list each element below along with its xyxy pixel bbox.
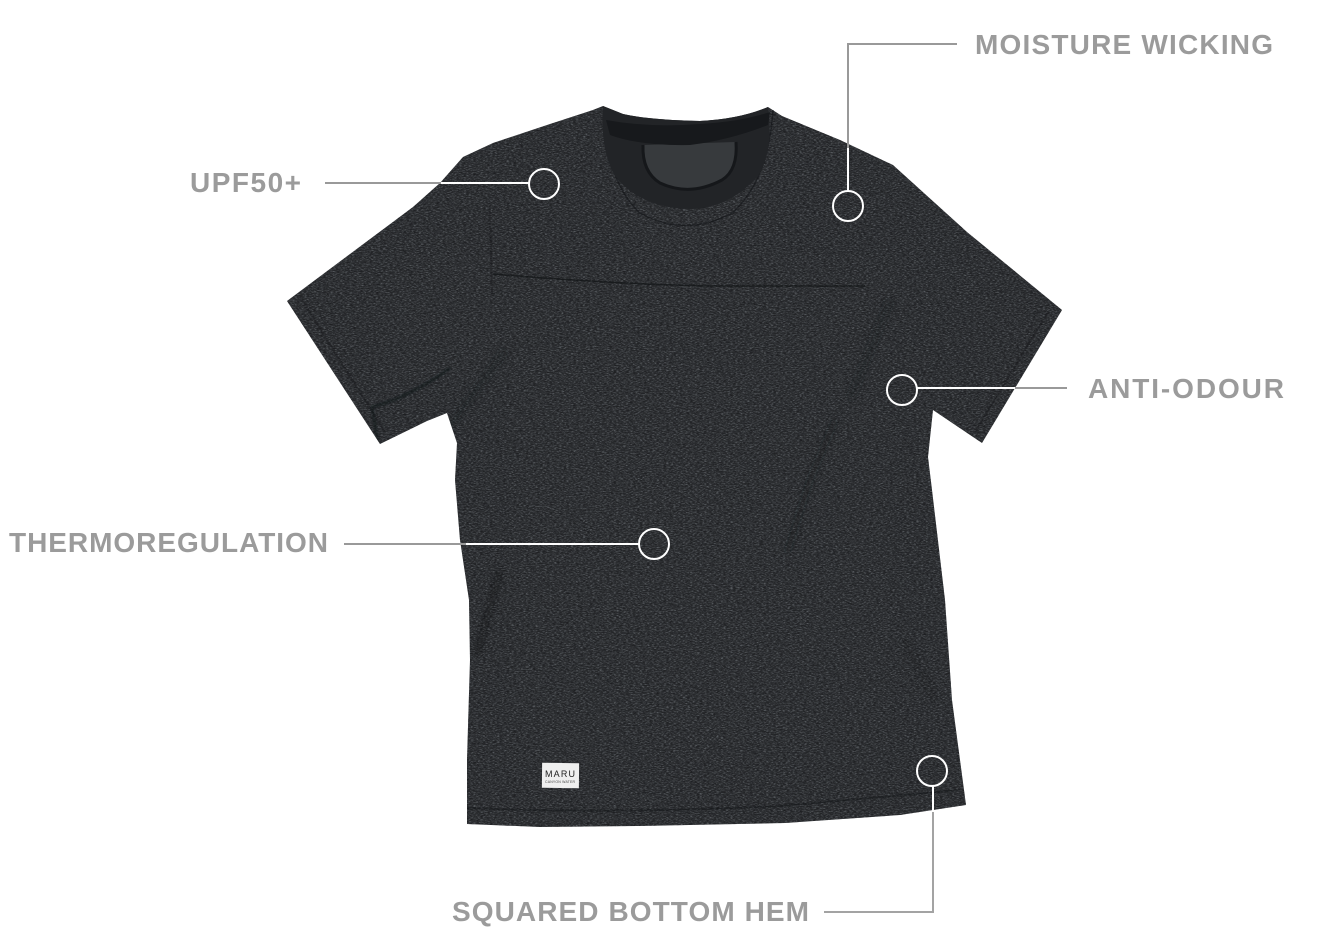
callout: thermoregulation: THERMOREGULATION <box>9 527 328 558</box>
callout: moisture wicking <box>833 29 1273 221</box>
fabric details <box>280 100 1080 835</box>
t-shirt photo <box>280 100 1080 835</box>
brand label <box>542 763 579 788</box>
callout: squared bottom hem <box>452 756 947 927</box>
brand label: CANYON WATER <box>545 780 575 784</box>
callout: UPF50+ <box>190 167 559 199</box>
back neck panel <box>643 142 736 189</box>
shirt body <box>287 106 1062 827</box>
callout: squared bottom hem: SQUARED BOTTOM HEM <box>452 896 809 927</box>
yoke seam <box>493 274 865 286</box>
callout: anti-odour <box>887 373 1284 405</box>
inner neck <box>602 106 770 209</box>
brand label: MARU <box>545 769 575 779</box>
callout: thermoregulation <box>9 527 669 559</box>
callout: anti-odour: ANTI-ODOUR <box>1088 373 1284 404</box>
callout: UPF50+: UPF50+ <box>190 167 301 198</box>
collar rib stitching <box>604 108 773 226</box>
neck tape <box>606 112 770 145</box>
callout: moisture wicking: MOISTURE WICKING <box>975 29 1273 60</box>
